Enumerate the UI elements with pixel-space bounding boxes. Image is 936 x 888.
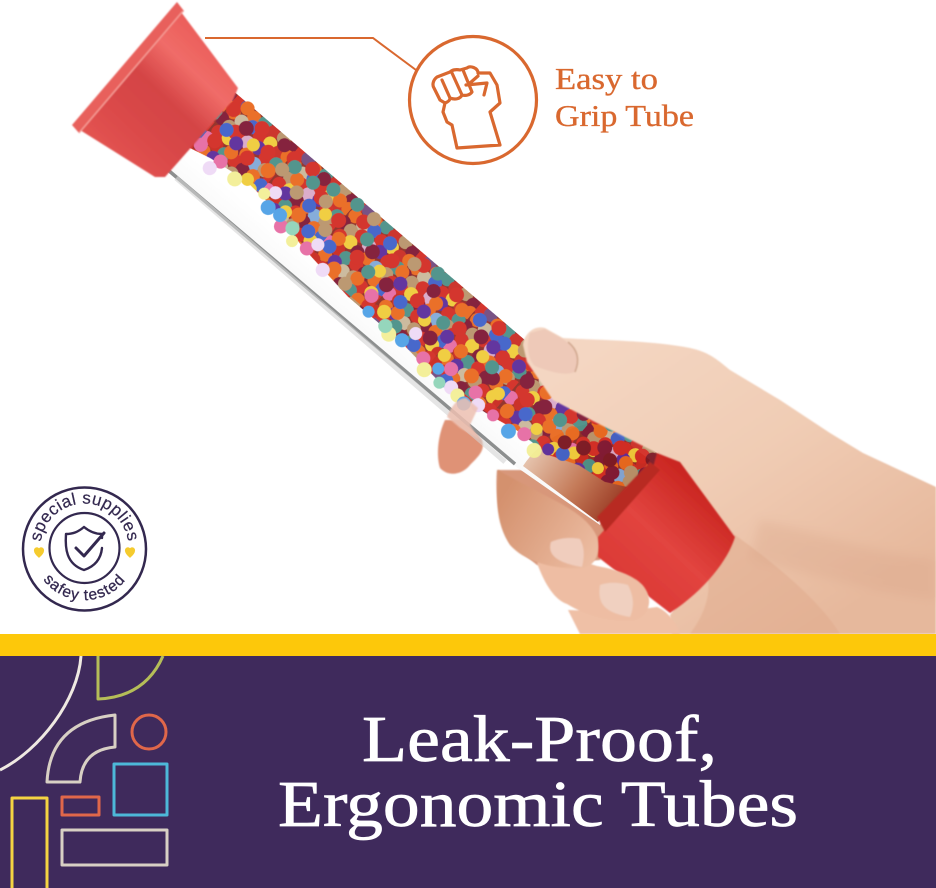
badge: special supplies safety tested — [22, 486, 148, 612]
callout label: Grip Tube — [555, 98, 694, 133]
bead underlay — [178, 92, 679, 539]
palm and index finger behind the tube — [438, 420, 620, 565]
main heading: Leak-Proof, — [362, 703, 717, 776]
callout: easy to grip tube — [410, 36, 694, 164]
callout label: Easy to — [555, 61, 658, 96]
yellow divider band — [0, 634, 936, 656]
badge bottom text: safey tested — [44, 574, 125, 602]
back of hand and thumb — [523, 327, 936, 634]
icon: hearts — [35, 548, 134, 557]
lower red cap — [597, 453, 735, 613]
photo: hand holding sensory tube — [72, 2, 936, 634]
reddish tube end seen through glass — [523, 422, 650, 522]
main heading: Ergonomic Tubes — [278, 768, 798, 841]
decorative outline shapes — [0, 656, 167, 888]
footer banner — [0, 656, 936, 888]
main heading — [278, 703, 798, 841]
coloured water beads — [173, 90, 681, 544]
top red cap — [72, 2, 238, 177]
callout label — [555, 61, 694, 133]
badge top text: special supplies — [32, 492, 136, 541]
tube body — [168, 92, 650, 525]
front fingers — [447, 398, 680, 634]
icon: shield with check — [66, 527, 104, 570]
icon: fist in circle — [410, 36, 536, 164]
callout leader line — [205, 38, 416, 70]
